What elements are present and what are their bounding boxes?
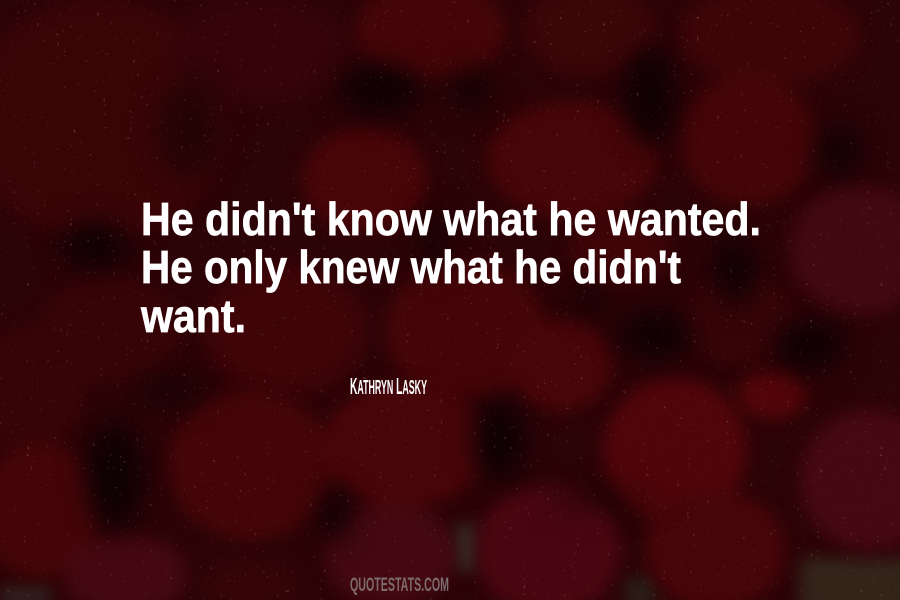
- quote text: [140, 193, 761, 342]
- berries, front row: [0, 185, 900, 600]
- quote line 3: want.: [140, 290, 246, 342]
- author name: KATHRYN LASKY: [350, 373, 427, 399]
- berries, back row: [0, 0, 860, 455]
- quote line 2: He only knew what he didn't: [141, 241, 681, 293]
- watermark: QUOTESTATS.COM: [350, 575, 449, 596]
- quote line 1: He didn't know what he wanted.: [141, 193, 761, 245]
- dark gaps between berries: [59, 45, 864, 541]
- tan surface showing between the berries: [0, 525, 900, 600]
